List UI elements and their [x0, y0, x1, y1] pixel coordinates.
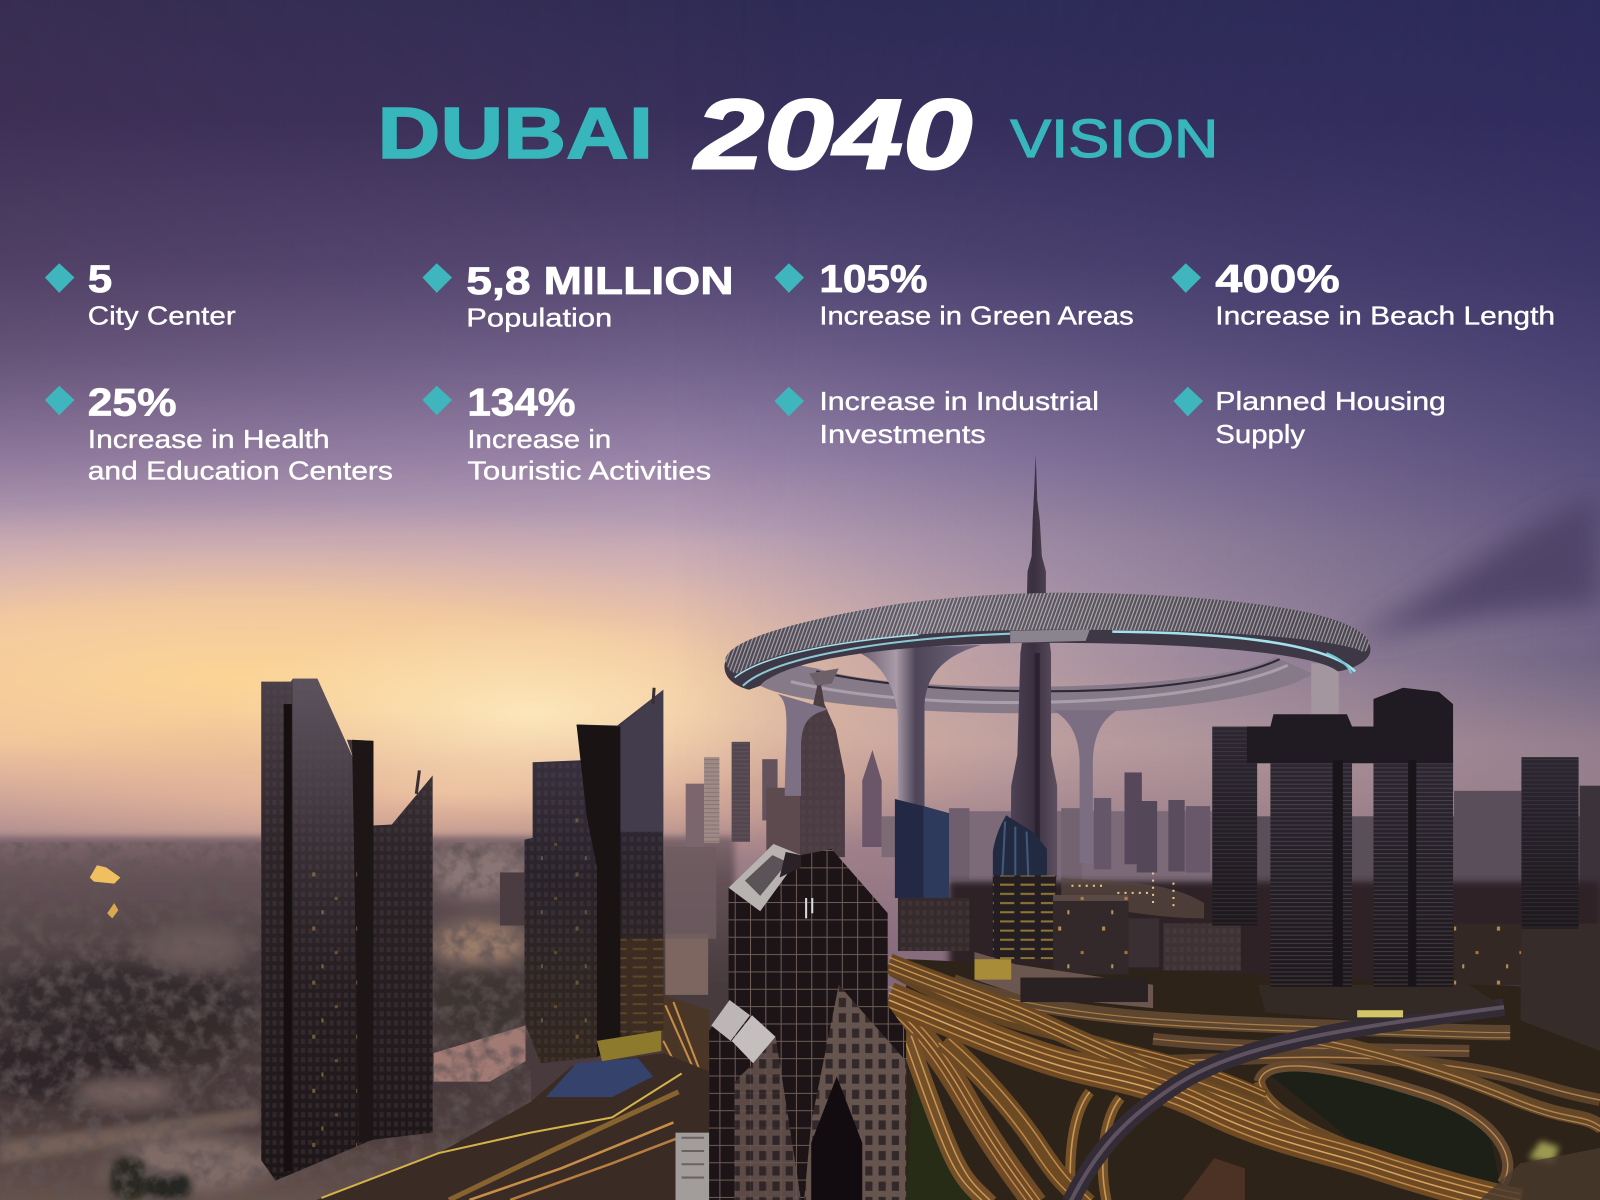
pillars supporting the ring: [778, 645, 1339, 900]
title: [378, 78, 1218, 189]
stat: 25% health and education: [45, 381, 393, 486]
ground: hazy city to the left: [0, 837, 735, 1200]
stat label second line: and Education Centers: [88, 458, 393, 486]
mid-distance right-hand buildings: [898, 876, 1600, 1051]
stat value: 25%: [88, 381, 177, 424]
stat label: Increase in Green Areas: [819, 302, 1134, 330]
stat: industrial investments: [774, 387, 1099, 449]
far half of the ring: [760, 657, 1312, 713]
stat: 400% beach length: [1171, 258, 1555, 330]
stat: 5,8 million population: [422, 260, 734, 333]
central foreground-left skyscrapers: [261, 679, 663, 1181]
icon: diamond bullet: [1173, 387, 1203, 416]
icon: diamond bullet: [45, 386, 74, 415]
stat: 105% green areas: [774, 258, 1134, 330]
stat label: Population: [466, 305, 612, 333]
corner highlights in the roads: [1480, 1141, 1600, 1200]
motorway interchange: [883, 957, 1600, 1200]
stat label: Increase in Beach Length: [1215, 302, 1555, 330]
stat label: Increase in Industrial: [819, 388, 1099, 416]
podium and plaza at tower base: [316, 1053, 709, 1200]
icon: diamond bullet: [774, 387, 804, 416]
stat value: 105%: [819, 258, 928, 301]
stat label second line: Supply: [1215, 421, 1305, 449]
stat label: Increase in Health: [88, 426, 330, 454]
stat: 5 city centers: [45, 258, 236, 330]
icon: diamond bullet: [1171, 263, 1201, 293]
stat label second line: Investments: [819, 421, 986, 449]
central foreground skyscraper: [709, 844, 906, 1200]
stat value: 134%: [467, 381, 576, 424]
icon: diamond bullet: [45, 263, 74, 293]
title word: DUBAI: DUBAI: [378, 93, 653, 174]
stat label second line: Touristic Activities: [467, 458, 711, 486]
title word: VISION: VISION: [1010, 109, 1218, 169]
stat value: 5,8 MILLION: [466, 260, 734, 303]
stat label: Increase in: [467, 426, 611, 454]
icon: diamond bullet: [774, 263, 804, 293]
stat: 134% touristic activities: [422, 381, 711, 486]
stat label: City Center: [88, 302, 236, 330]
twin towers with sky bridge: [1212, 688, 1579, 987]
distant skyline: [686, 742, 1600, 988]
title year: 2040: 2040: [692, 78, 972, 189]
stat label: Planned Housing: [1215, 388, 1446, 416]
stat value: 5: [88, 258, 112, 301]
towers behind ring pillars: [800, 668, 845, 857]
icon: diamond bullet: [422, 386, 452, 415]
stat: planned housing supply: [1173, 387, 1446, 449]
near half of the ring with ribbed facade: [724, 593, 1370, 690]
Burj Khalifa tower: [1010, 454, 1057, 878]
icon: diamond bullet: [422, 263, 452, 293]
stat value: 400%: [1215, 258, 1340, 301]
glass towers in mid distance: [895, 799, 1047, 898]
